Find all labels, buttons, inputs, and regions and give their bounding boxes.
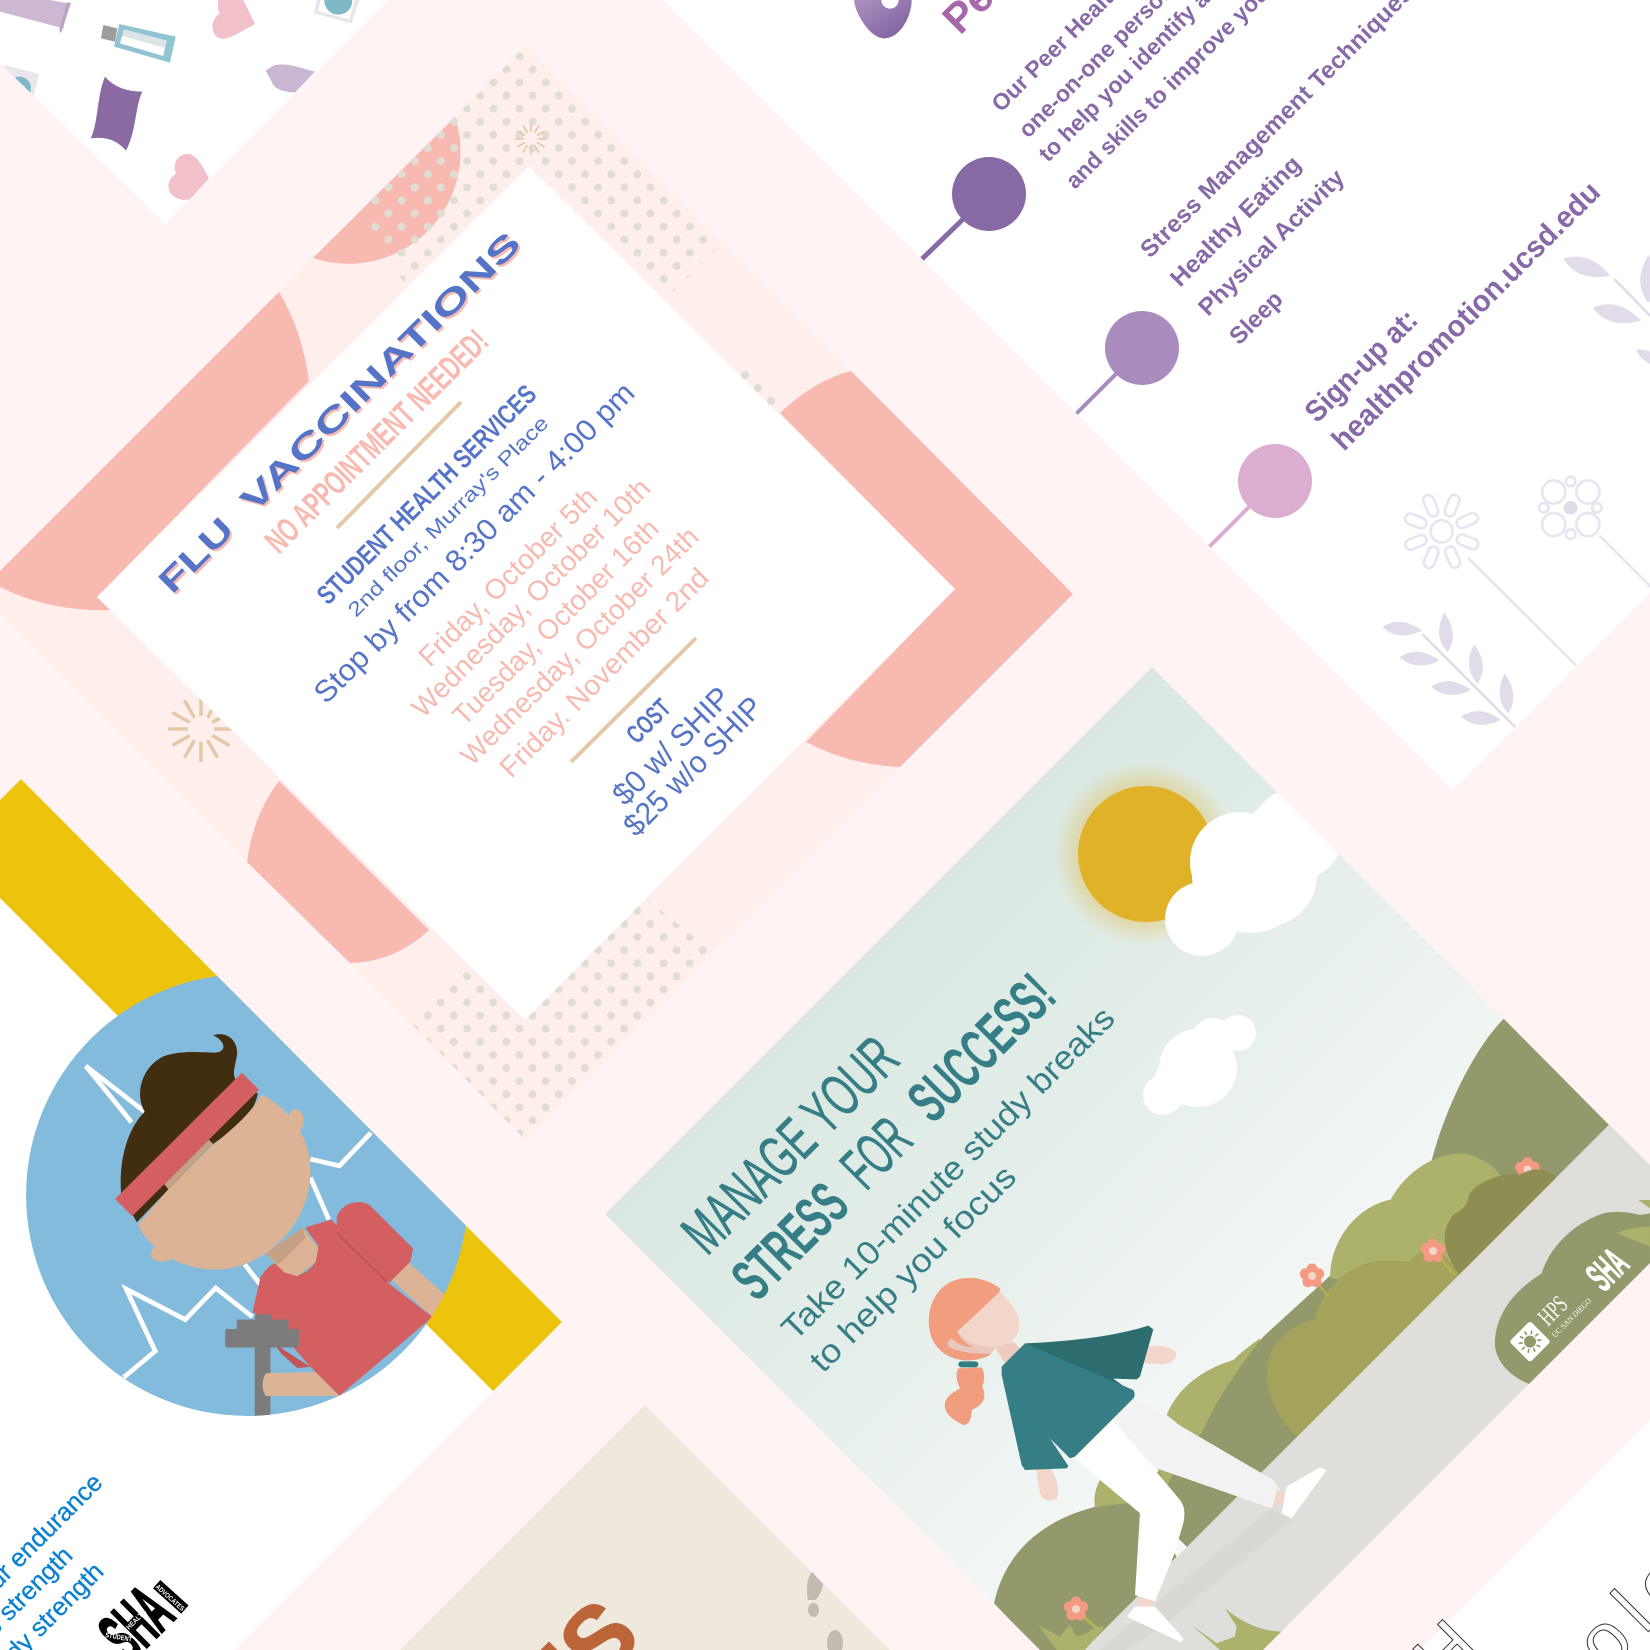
heading: flu vaccinations: VACCINATIONS: [233, 224, 528, 519]
text block: topics: Physical Activity: [1193, 164, 1351, 321]
hand upper: [1142, 1346, 1176, 1364]
neck: [995, 1342, 1020, 1363]
heading: manage your stress for success: MANAGE YOUR: [669, 1024, 911, 1266]
frame: top salmon arc: [313, 117, 461, 264]
road shadow: [1100, 1508, 1292, 1650]
hair: [121, 1034, 258, 1222]
hand lower: [1036, 1467, 1058, 1501]
sleeve seam: [337, 1233, 387, 1282]
road: [1084, 1124, 1650, 1650]
icon: packet left: [4, 65, 40, 96]
hair tie: [958, 1361, 978, 1367]
grass: [1038, 1625, 1105, 1650]
dumbbell: [225, 1314, 299, 1420]
text block: study breaks: Take 10-minute study breaks: [774, 999, 1122, 1347]
heading: manage your stress for success: [680, 972, 1056, 1298]
dates list: Friday, October 5th: [412, 481, 603, 672]
icon: heart bottom: [168, 154, 209, 200]
logo text: HPS: HPS: [1533, 1291, 1573, 1331]
divider rule lower: [571, 638, 696, 762]
face: [138, 1094, 310, 1270]
yellow band: [0, 779, 562, 1392]
text block: study breaks: to help you focus: [802, 1158, 1023, 1379]
light bush top: [1330, 1154, 1501, 1283]
subheading: no appointment needed: NO APPOINTMENT NEEDED!: [258, 322, 496, 561]
panel: peer health poster: [663, 0, 1650, 790]
shoe front: [1127, 1607, 1183, 1643]
panel: sexual health products poster: [0, 0, 389, 224]
text block: sign up: Sign-up at:: [1299, 303, 1424, 429]
hill upper right: [1431, 1018, 1609, 1177]
panel: fitness poster: [0, 779, 562, 1650]
cost text: $25 w/o SHIP: [616, 690, 770, 843]
panel: colouring poster: [1397, 1420, 1650, 1650]
flower behind dark bush: [1515, 1157, 1540, 1175]
bullet: dark purple lollipop: [922, 157, 1026, 259]
heading: manage your stress for success: FOR: [828, 1104, 925, 1201]
logo text: HPS: UC SAN DIEGO: [1550, 1296, 1593, 1339]
sleeve shade: [274, 1343, 310, 1368]
icon: lubricant tube: [0, 0, 71, 33]
pattern: dots top: [366, 46, 722, 395]
icon: spray bottle: [101, 24, 176, 63]
panel: stress management poster: [605, 667, 1650, 1650]
icon: large sunburst: [168, 696, 234, 762]
arm right: [392, 1262, 446, 1317]
heading: flu vaccinations: VACCINATIONS: [235, 226, 530, 521]
ponytail: [945, 1367, 984, 1425]
olive lower hill: [994, 1502, 1177, 1650]
flowers: [1064, 1238, 1455, 1630]
icon: purple pouch: [91, 77, 142, 151]
dates list: Tuesday, October 16th: [446, 513, 665, 731]
ear shade: [948, 1332, 995, 1354]
dark bush: [1445, 1169, 1559, 1277]
dates list: Friday. November 2nd: [493, 562, 715, 783]
heading: manage your stress for success: SUCCESS!: [895, 961, 1068, 1134]
heading: manage your stress for success: STRESS: [719, 1170, 861, 1312]
poster sky: [605, 667, 1650, 1650]
icon: packet top right: [314, 0, 359, 23]
dates list: Wednesday, October 10th: [405, 472, 656, 723]
pattern: dots bottom: [412, 885, 710, 1140]
cost text: COST: [620, 693, 677, 749]
icon: small cloud: [1143, 1015, 1256, 1115]
dates list: [405, 472, 715, 783]
text block: topics: Sleep: [1224, 286, 1288, 350]
ankle front: [1137, 1597, 1153, 1611]
logo: SHA black: [85, 1572, 189, 1650]
logo bush: [1495, 1200, 1650, 1384]
frame: right salmon band: [780, 371, 1073, 767]
hill band: [1157, 1276, 1422, 1547]
front leg: [1073, 1420, 1184, 1602]
logo: SHA black: HEALTH: [125, 1609, 148, 1631]
flu poster white card: [97, 166, 955, 1020]
divider rule: [337, 402, 461, 528]
location text: 2nd floor, Murray's Place: [344, 412, 553, 622]
frame: left salmon band: [0, 292, 309, 610]
lower arm: [263, 1372, 339, 1396]
logo text: HPS: [1533, 1291, 1593, 1339]
illustration: walking girl: [929, 1278, 1327, 1650]
sleeve dark: [1025, 1326, 1153, 1388]
ankle back: [1273, 1490, 1288, 1506]
icon: lilac tube: [266, 64, 315, 93]
cost text: $0 w/ SHIP: [605, 680, 737, 812]
logo: SHA black: ADVOCATES: [154, 1584, 185, 1613]
hair: [929, 1278, 1000, 1360]
logo: SHA black: STUDENT: [105, 1632, 133, 1644]
icon: flower two: [1539, 477, 1650, 603]
text block: topics: Healthy Eating: [1165, 151, 1307, 292]
icon: flower one: [1404, 493, 1576, 666]
heading: flu vaccinations: FLU: [151, 510, 241, 600]
panel: beige poster: [400, 1405, 890, 1650]
decoration: pale flowers and leaves: [1382, 251, 1650, 727]
panel: flu vaccinations poster: [0, 46, 1073, 1140]
dress: [1002, 1343, 1135, 1470]
hours text: Stop by from 8:30 am - 4:00 pm: [308, 376, 641, 710]
neck: [266, 1228, 318, 1276]
illustration: hills and bushes: [994, 1019, 1609, 1650]
frame: bottom salmon arc: [247, 781, 429, 963]
light bush behind leg: [1094, 1480, 1128, 1507]
icon: teardrop logo: [854, 0, 912, 38]
icon: leaf branch lower: [1382, 612, 1515, 727]
ears: [150, 1109, 304, 1262]
shoulder sleeve: [337, 1202, 413, 1283]
bullet: mid purple lollipop: [1076, 311, 1179, 414]
dates list: Wednesday, October 24th: [454, 521, 705, 771]
light bush back: [1166, 1338, 1260, 1436]
icon: leaf branch upper: [1564, 255, 1650, 364]
icon: heart top: [213, 0, 255, 39]
shirt: [253, 1220, 432, 1396]
text block: sign up: healthpromotion.ucsd.edu: [1326, 176, 1607, 457]
pattern: dots right: [741, 371, 775, 405]
illustration: weightlifter: [26, 974, 468, 1420]
icon: sun logo: [1509, 1321, 1551, 1362]
icon: large cloud: [1165, 788, 1343, 956]
headband: [124, 1081, 250, 1208]
back leg: [1113, 1398, 1280, 1508]
shoe back: [1282, 1467, 1327, 1518]
icon: small sunburst: [515, 123, 547, 155]
location text: [311, 379, 553, 622]
heading: flu vaccinations: FLU: [153, 512, 243, 602]
icon: footprints: [807, 1572, 843, 1650]
face shade: [164, 1140, 213, 1189]
mid bush: [1267, 1248, 1464, 1438]
location text: STUDENT HEALTH SERVICES: [311, 379, 542, 610]
icon: sun: [1058, 766, 1225, 942]
heading: flu vaccinations: [151, 224, 530, 602]
bullet: pink lollipop: [1209, 444, 1312, 547]
lightning lines: [86, 1066, 371, 1377]
face: [957, 1292, 1019, 1347]
